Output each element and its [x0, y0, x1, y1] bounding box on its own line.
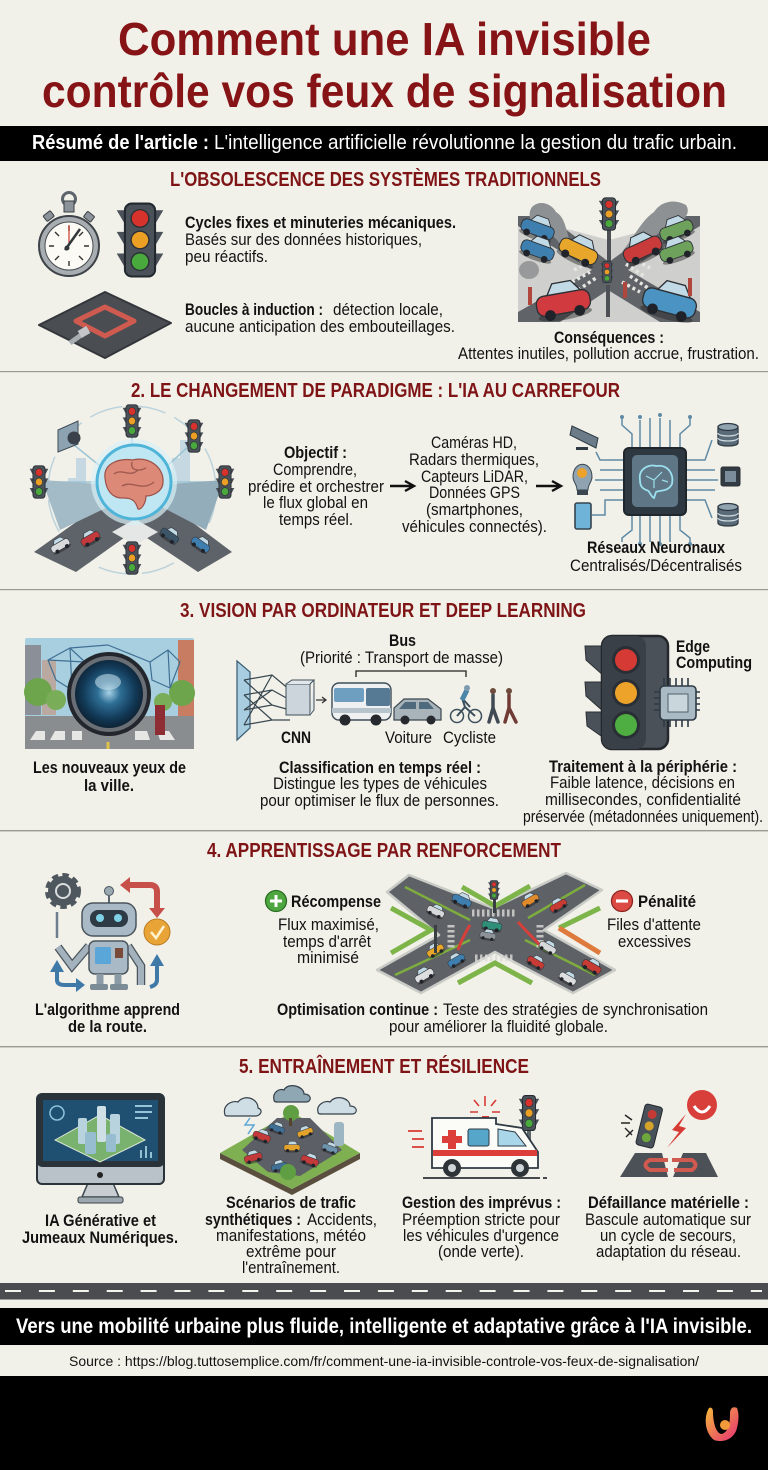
caption: the algorithm learns: L'algorithme apprend — [35, 1001, 180, 1019]
text: edge processing: millisecondes, confidentialité — [545, 791, 741, 809]
caption: the algorithm learns — [35, 1001, 180, 1036]
illustration: ambulance — [408, 1095, 547, 1178]
text: objective: Comprendre, — [273, 461, 357, 479]
text: objective: temps réel. — [279, 511, 353, 529]
text: neural networks — [570, 539, 742, 575]
text: synthetic scenarios: manifestations, météo — [216, 1227, 366, 1245]
illustration: car — [394, 699, 441, 724]
caption: generative AI: Jumeaux Numériques. — [22, 1229, 178, 1247]
arrow: sensors to networks — [536, 481, 561, 491]
heading: section 4: 4. APPRENTISSAGE PAR RENFORCEMENT — [207, 840, 561, 862]
text: fixed cycles: peu réactifs. — [185, 248, 268, 266]
text: neural networks: Réseaux Neuronaux — [587, 539, 726, 557]
icon: stopwatch — [39, 192, 99, 276]
text: consequences: Conséquences : — [554, 329, 664, 347]
text: sensors: (smartphones, — [426, 501, 523, 519]
text: synthetic scenarios: l'entraînement. — [242, 1259, 340, 1277]
icon: hardware failure — [620, 1090, 718, 1177]
caption: new eyes of the city — [33, 759, 186, 795]
label: bus priority: (Priorité : Transport de masse) — [300, 649, 503, 667]
text: objective: prédire et orchestrer — [248, 478, 384, 496]
text: emergencies: Gestion des imprévus : — [402, 1194, 561, 1212]
title: Comment une IA invisible — [118, 13, 651, 65]
icon: induction loop — [39, 292, 171, 358]
text: reward detail: Flux maximisé, — [278, 916, 379, 934]
labels: classified objects: CNN — [281, 729, 311, 747]
source line: Source : https://blog.tuttosemplice.com/fr/comment-une-ia-invisible-controle-vos-feux-de-signalisation/ — [69, 1353, 699, 1369]
panel: computer vision — [24, 600, 763, 826]
text: synthetic scenarios: Accidents, — [307, 1211, 377, 1229]
text: real-time classification: Distingue les types de véhicules — [273, 775, 487, 793]
text: emergencies: (onde verte). — [438, 1243, 524, 1261]
footer band — [0, 1376, 768, 1470]
label: edge computing — [676, 638, 752, 672]
text: hardware failure — [585, 1194, 751, 1261]
diagram: CNN network — [237, 661, 326, 740]
text: synthetic scenarios: Scénarios de trafic — [226, 1194, 356, 1212]
text: emergencies: Préemption stricte pour — [402, 1211, 560, 1229]
labels: classified objects — [281, 729, 496, 747]
text: objective: le flux global en — [263, 494, 368, 512]
text: fixed cycles: Cycles fixes et minuteries mécaniques. — [185, 214, 456, 232]
text: sensors: Capteurs LiDAR, — [421, 468, 528, 486]
illustration: AI chip with neural networks — [570, 413, 740, 546]
illustration: pedestrians — [489, 688, 516, 722]
text: penalty detail — [607, 916, 701, 951]
road divider — [0, 1283, 768, 1300]
text: fixed cycles: Basés sur des données historiques, — [185, 231, 422, 249]
text: induction loops — [185, 301, 455, 336]
text: consequences — [458, 329, 759, 363]
text: hardware failure: Bascule automatique sur — [585, 1211, 751, 1229]
text: synthetic scenarios: synthétiques : — [205, 1211, 301, 1229]
penalty label — [612, 890, 696, 912]
heading: section 3: 3. VISION PAR ORDINATEUR ET DEEP LEARNING — [180, 600, 586, 622]
text: continuous optimisation: Optimisation continue : — [277, 1001, 438, 1019]
caption: generative AI — [22, 1212, 178, 1247]
text: continuous optimisation: Teste des stratégies de synchronisation — [443, 1001, 708, 1019]
icon: traffic light — [117, 204, 163, 276]
caption: new eyes of the city: la ville. — [84, 777, 134, 795]
reward label: Récompense — [291, 893, 381, 911]
text: sensors: Radars thermiques, — [409, 451, 539, 469]
label: edge computing: Edge — [676, 638, 710, 656]
text: sensors — [402, 434, 547, 536]
text: hardware failure: un cycle de secours, — [600, 1227, 736, 1245]
label: edge computing: Computing — [676, 654, 752, 672]
text: synthetic scenarios — [205, 1194, 377, 1277]
text: reward detail: temps d'arrêt — [283, 933, 371, 951]
text: edge processing — [523, 758, 763, 826]
caption: generative AI: IA Générative et — [45, 1212, 156, 1230]
text: neural networks: Centralisés/Décentralisés — [570, 557, 742, 575]
penalty label: Pénalité — [638, 893, 696, 911]
title: contrôle vos feux de signalisation — [42, 65, 727, 117]
text: induction loops: détection locale, — [333, 301, 443, 319]
text: edge processing: Traitement à la périphérie : — [549, 758, 737, 776]
text: sensors: Caméras HD, — [431, 434, 517, 452]
labels: classified objects: Voiture — [385, 729, 432, 747]
text: objective: Objectif : — [284, 444, 347, 462]
text: continuous optimisation: pour améliorer la fluidité globale. — [389, 1018, 608, 1036]
illustration: traffic jam — [518, 198, 701, 326]
panel: obsolescence — [39, 168, 759, 363]
panel: paradigm change — [30, 380, 742, 575]
labels: classified objects: Cycliste — [443, 729, 496, 747]
heading: section 2: 2. LE CHANGEMENT DE PARADIGME : L'IA AU CARREFOUR — [131, 380, 620, 402]
panel: training and resilience — [22, 1054, 751, 1277]
text: induction loops: aucune anticipation des embouteillages. — [185, 318, 455, 336]
text: emergencies: les véhicules d'urgence — [403, 1227, 559, 1245]
summary banner: Résumé de l'article : — [32, 132, 209, 154]
heading: section 5: 5. ENTRAÎNEMENT ET RÉSILIENCE — [239, 1054, 529, 1078]
caption: the algorithm learns: de la route. — [68, 1018, 147, 1036]
text: hardware failure: adaptation du réseau. — [596, 1243, 741, 1261]
panel: reinforcement learning — [35, 840, 708, 1036]
illustration: bus — [332, 683, 391, 726]
text: sensors: véhicules connectés). — [402, 518, 547, 536]
text: edge processing: Faible latence, décisions en — [550, 774, 735, 792]
logo — [706, 1407, 738, 1441]
text: continuous optimisation — [277, 1001, 708, 1036]
text: emergencies — [402, 1194, 561, 1261]
icon: digital twin monitor — [37, 1094, 164, 1203]
illustration: intersection with traffic flows — [377, 873, 615, 993]
text: penalty detail: Files d'attente — [607, 916, 701, 934]
illustration: camera lens in the city — [24, 638, 195, 749]
conclusion banner — [0, 1308, 768, 1345]
icon: traffic light with edge chip — [585, 636, 700, 749]
illustration: synthetic traffic scenarios — [220, 1086, 360, 1195]
text: synthetic scenarios: extrême pour — [246, 1243, 336, 1261]
text: real-time classification: Classification en temps réel : — [279, 759, 481, 777]
summary banner — [0, 126, 768, 161]
title — [42, 13, 727, 117]
illustration: cyclist — [450, 685, 482, 722]
illustration: AI brain at the crossroads — [30, 405, 234, 574]
text: real-time classification: pour optimiser le flux de personnes. — [260, 792, 499, 810]
text: hardware failure: Défaillance matérielle : — [588, 1194, 749, 1212]
caption: new eyes of the city: Les nouveaux yeux de — [33, 759, 186, 777]
text: fixed cycles — [185, 214, 456, 266]
arrow: objective to sensors — [390, 481, 414, 491]
text: objective — [248, 444, 384, 529]
text: real-time classification — [260, 759, 499, 810]
text: sensors: Données GPS — [429, 484, 520, 502]
text: reward detail: minimisé — [297, 949, 359, 967]
reward label — [266, 890, 381, 912]
text: induction loops: Boucles à induction : — [185, 301, 323, 319]
text: reward detail — [278, 916, 379, 967]
heading: section 1: L'OBSOLESCENCE DES SYSTÈMES TRADITIONNELS — [170, 168, 601, 191]
summary banner: L'intelligence artificielle révolutionne la gestion du trafic urbain. — [214, 132, 737, 154]
text: penalty detail: excessives — [618, 933, 691, 951]
illustration: learning robot — [48, 876, 170, 992]
label: bus priority: Bus — [389, 632, 416, 650]
label: bus priority — [300, 632, 503, 677]
